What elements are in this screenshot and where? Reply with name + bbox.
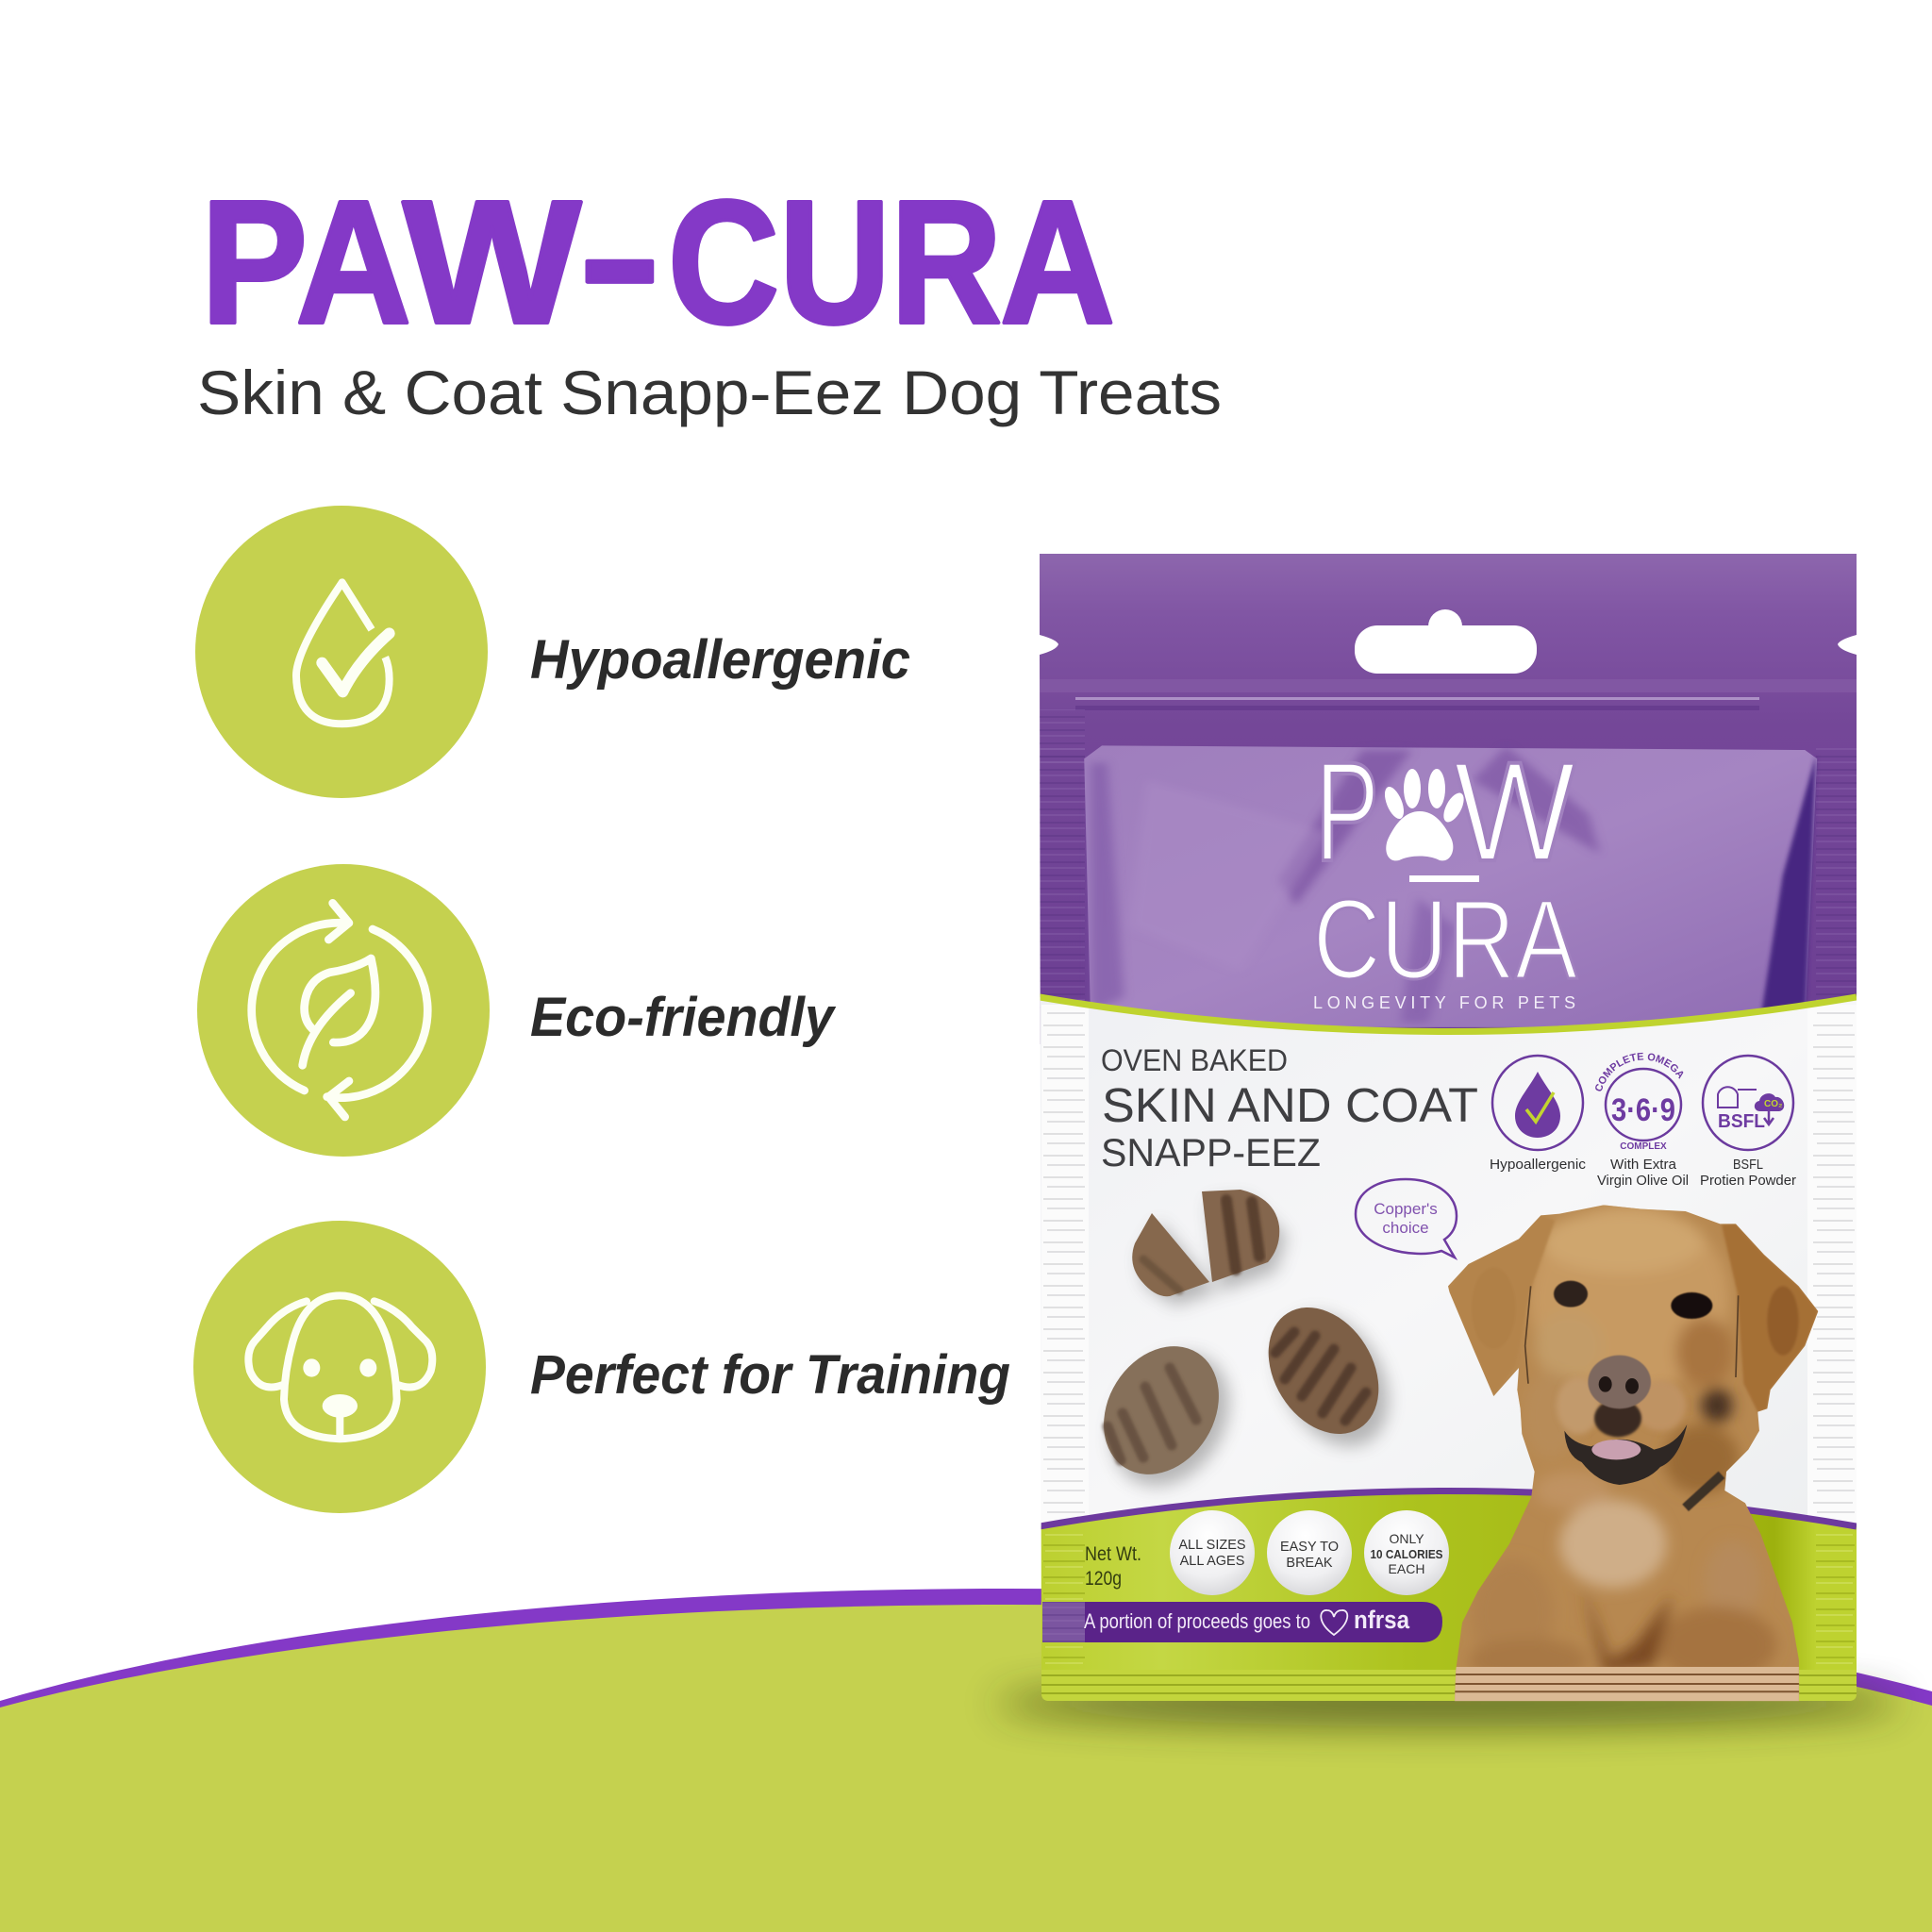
title: A — [1000, 165, 1115, 360]
speech bubble — [1356, 1179, 1457, 1257]
badge: omega 3-6-9 — [1595, 1053, 1689, 1189]
badge: omega 3-6-9: 3·6·9 — [1611, 1092, 1675, 1128]
badge: omega 3-6-9: Virgin Olive Oil — [1597, 1173, 1689, 1189]
purple proceeds bar: nfrsa — [1354, 1606, 1410, 1634]
treat: left oval — [1080, 1324, 1242, 1496]
pouch top purple area — [1040, 554, 1857, 1044]
pill: easy to break: BREAK — [1286, 1556, 1333, 1571]
icon: water drop with check — [195, 506, 488, 798]
product pouch — [1040, 554, 1857, 1702]
label: Hypoallergenic: Hypoallergenic — [530, 629, 910, 691]
pill: only 10 calories each — [1364, 1510, 1449, 1595]
title: PA — [201, 165, 411, 360]
title: CUR — [668, 165, 1002, 360]
icon: paw print — [1381, 769, 1468, 860]
pouch logo: W — [1454, 732, 1575, 891]
pouch logo — [1313, 732, 1577, 1012]
title: W — [403, 165, 581, 360]
badge: omega 3-6-9: COMPLEX — [1620, 1141, 1667, 1152]
treat: broken right half — [1202, 1190, 1279, 1282]
badge: hypoallergenic — [1490, 1056, 1587, 1173]
subtitle: Skin & Coat Snapp-Eez Dog Treats — [197, 358, 1222, 427]
purple proceeds bar: A portion of proceeds goes to — [1084, 1609, 1310, 1633]
pouch product name: SKIN AND COAT — [1102, 1078, 1478, 1132]
pill: only 10 calories each: EACH — [1389, 1561, 1424, 1576]
badge: BSFL protein powder: BSFL — [1718, 1111, 1765, 1132]
bag ground shadow — [995, 1681, 1901, 1726]
pouch product name: OVEN BAKED — [1101, 1043, 1288, 1077]
feature: hypoallergenic — [195, 506, 910, 798]
badge: omega 3-6-9: With Extra — [1610, 1157, 1677, 1173]
dog photo illustration — [1446, 1201, 1824, 1705]
treat: right oval — [1246, 1287, 1401, 1455]
badge: BSFL protein powder — [1700, 1056, 1796, 1189]
icon: recycling arrows with leaf — [197, 864, 490, 1157]
feature: perfect for training — [193, 1221, 1010, 1513]
title: - — [578, 159, 661, 355]
pill: all sizes all ages: ALL AGES — [1180, 1554, 1244, 1569]
pill: all sizes all ages: ALL SIZES — [1178, 1538, 1246, 1553]
pill: easy to break: EASY TO — [1280, 1540, 1339, 1555]
pouch logo: P — [1315, 732, 1379, 891]
speech bubble: choice — [1382, 1219, 1429, 1237]
pouch white middle area — [1040, 997, 1857, 1547]
badge: BSFL protein powder: Protien Powder — [1700, 1173, 1796, 1189]
badge: hypoallergenic: Hypoallergenic — [1490, 1157, 1587, 1173]
treat: broken left half — [1132, 1213, 1209, 1296]
pouch bottom lime area — [1040, 1491, 1857, 1707]
speech bubble: Copper's — [1374, 1200, 1438, 1218]
pill: all sizes all ages — [1170, 1510, 1255, 1595]
pouch logo: LONGEVITY FOR PETS — [1313, 993, 1575, 1012]
net weight — [1085, 1543, 1141, 1590]
pouch hang hole — [1355, 609, 1537, 674]
net weight: Net Wt. — [1085, 1543, 1141, 1565]
icon: nfrsa heart — [1321, 1610, 1347, 1635]
icon: dog face — [193, 1221, 486, 1513]
pill: easy to break — [1267, 1510, 1352, 1595]
badge: omega 3-6-9: COMPLETE OMEGA — [1595, 1053, 1683, 1091]
label: Perfect for Training: Perfect for Training — [530, 1344, 1010, 1406]
purple proceeds bar — [1042, 1602, 1442, 1642]
badge: BSFL protein powder: BSFL — [1733, 1157, 1763, 1173]
ground: green curved band with purple edge — [0, 1589, 1932, 1932]
pouch logo: CURA — [1313, 876, 1577, 1003]
treats — [1080, 1190, 1411, 1507]
pill: only 10 calories each: 10 CALORIES — [1370, 1548, 1443, 1561]
pill: only 10 calories each: ONLY — [1389, 1531, 1424, 1546]
pouch product name — [1101, 1043, 1478, 1174]
pouch product name: SNAPP-EEZ — [1101, 1130, 1321, 1174]
feature: eco-friendly — [197, 864, 837, 1157]
badge: BSFL protein powder: CO₂ — [1764, 1099, 1782, 1109]
net weight: 120g — [1085, 1568, 1122, 1590]
label: Eco-friendly: Eco-friendly — [530, 987, 837, 1048]
